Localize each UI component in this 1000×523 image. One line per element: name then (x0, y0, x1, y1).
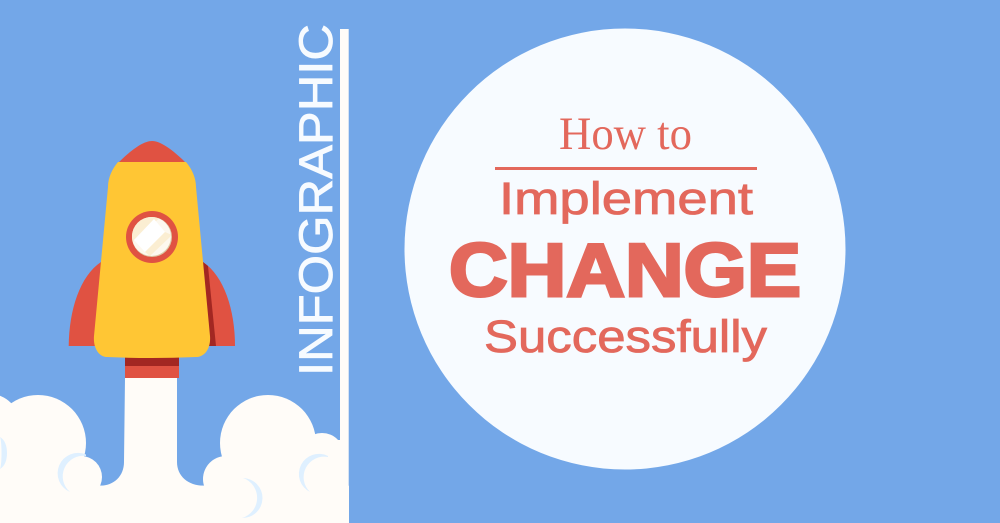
right cloud crescent (299, 454, 328, 492)
title line: Implement: Implement (499, 173, 754, 224)
nose cone (118, 141, 186, 163)
title line: CHANGE: CHANGE (449, 228, 801, 312)
exhaust and clouds (0, 378, 349, 523)
right cloud (203, 395, 344, 523)
ground cloud base (0, 486, 349, 523)
left cloud crescent (58, 453, 86, 492)
right fin shadow (203, 262, 216, 346)
nozzle (125, 355, 179, 378)
vertical divider line (340, 29, 349, 523)
right fin (195, 262, 235, 346)
exhaust trail (100, 378, 204, 523)
left edge crescent (0, 437, 7, 469)
title (449, 108, 801, 362)
title rule (495, 167, 757, 170)
rocket body (94, 162, 210, 358)
left cloud (0, 394, 102, 523)
rocket (69, 141, 235, 378)
left fin (69, 262, 110, 346)
title line: How to: How to (559, 108, 692, 160)
porthole (126, 211, 178, 263)
title circle (404, 28, 846, 470)
cloud highlights (0, 437, 328, 518)
bottom cloud crescent (242, 478, 262, 518)
vertical label: INFOGRAPHIC: INFOGRAPHIC (289, 24, 342, 376)
title line: Successfully: Successfully (484, 311, 768, 362)
